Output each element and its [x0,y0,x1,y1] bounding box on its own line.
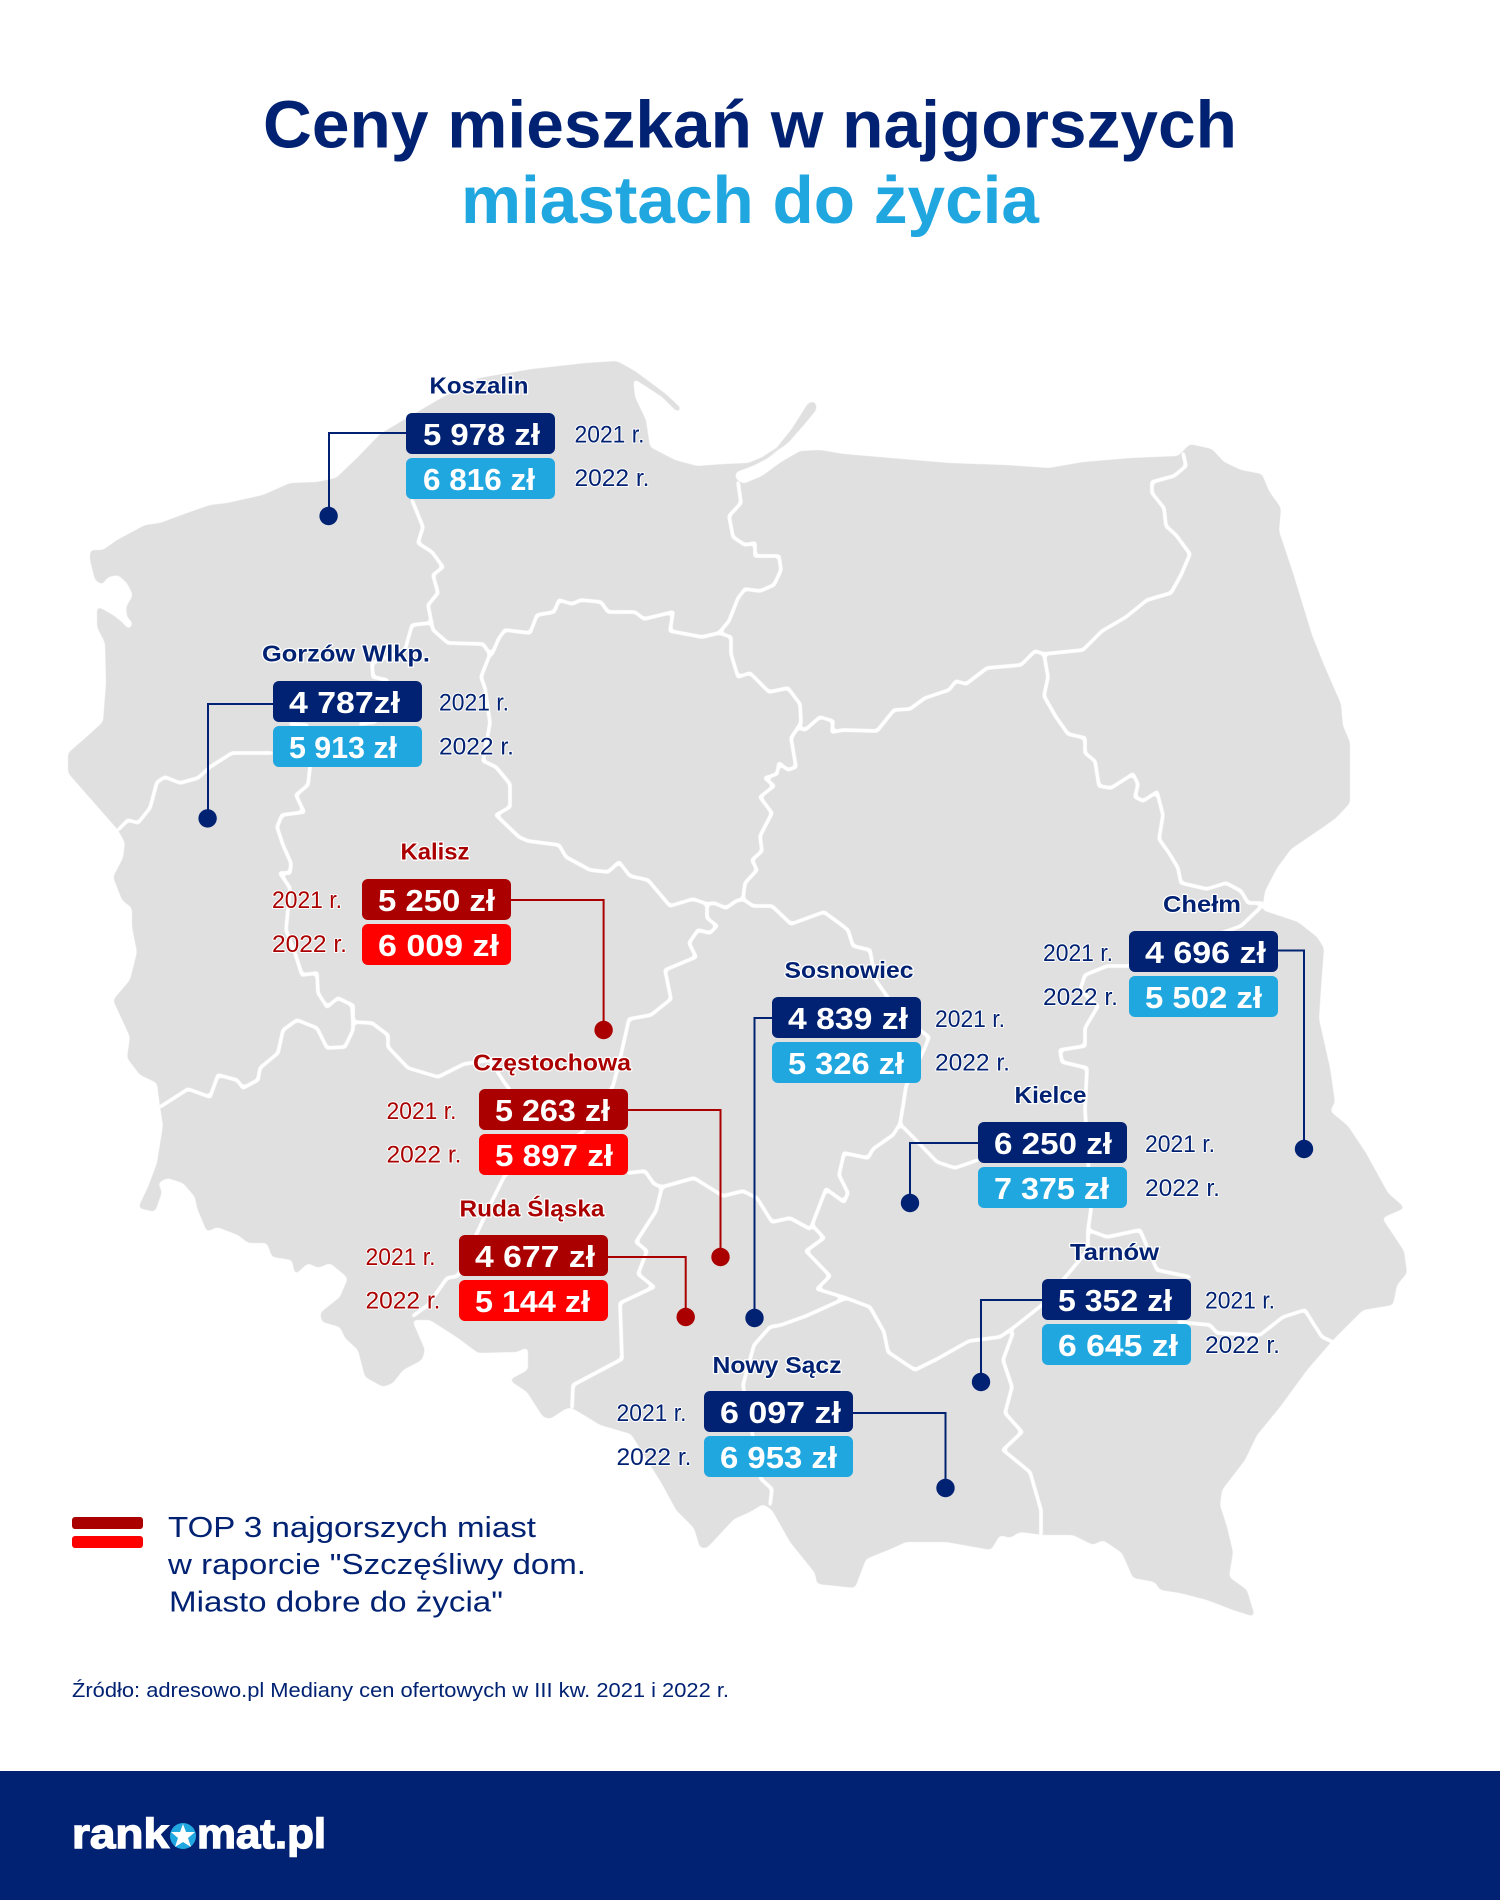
legend: w raporcie "Szczęśliwy dom. [167,1549,586,1581]
callout: Koszalin: 2022 r. [574,465,650,492]
callout: Kalisz: 5 250 zł [378,883,495,918]
callout: Kalisz: 6 009 zł [378,928,499,963]
callout: Koszalin: 6 816 zł [423,462,535,497]
callout: Częstochowa: 5 897 zł [495,1138,613,1173]
callout: Tarnów: 5 352 zł [1058,1283,1172,1318]
title [263,88,1237,238]
footer band [0,1771,1500,1900]
callout: Koszalin: Koszalin [430,372,528,398]
callout: Chełm: 2022 r. [1043,984,1118,1011]
callout: Kalisz: 2022 r. [272,931,347,958]
callout: Gorzów Wlkp.: 5 913 zł [289,730,397,765]
callout: Tarnów: Tarnów [1070,1239,1159,1265]
callout: Ruda Śląska [366,1194,695,1326]
callout: Częstochowa: 5 263 zł [495,1093,610,1128]
callout: Ruda Śląska: 5 144 zł [475,1284,590,1319]
callout: Nowy Sącz: 6 097 zł [720,1395,841,1430]
callout: Chełm: 4 696 zł [1145,935,1266,970]
callout: Koszalin: 2021 r. [574,422,644,448]
logo: rankomat.pl: rank [72,1810,170,1857]
callout: Koszalin: 5 978 zł [423,417,540,452]
callout: Chełm: 5 502 zł [1145,980,1262,1015]
callout: Koszalin [319,372,650,525]
callout: Ruda Śląska: 4 677 zł [475,1239,595,1274]
callout: Częstochowa: Częstochowa [473,1050,631,1076]
callout: Kielce: 7 375 zł [994,1171,1109,1206]
callout: Chełm: 2021 r. [1043,940,1113,967]
legend [72,1512,586,1618]
callout: Kielce: Kielce [1014,1082,1086,1108]
callout: Sosnowiec: 2021 r. [935,1006,1005,1033]
callout: Kielce: 6 250 zł [994,1126,1112,1161]
callout: Sosnowiec [745,957,1010,1327]
callout: Chełm [1043,891,1313,1158]
callout: Nowy Sącz: 2022 r. [616,1444,692,1471]
callout: Nowy Sącz [616,1352,955,1497]
legend: Miasto dobre do życia" [169,1586,503,1618]
callout: Częstochowa: 2021 r. [386,1098,456,1125]
legend: TOP 3 najgorszych miast [168,1512,536,1544]
logo: rankomat.pl [72,1810,326,1857]
callout: Sosnowiec: 5 326 zł [788,1046,904,1081]
callout: Gorzów Wlkp.: 2022 r. [439,734,514,760]
title: miastach do życia [461,163,1040,238]
callout: Gorzów Wlkp.: 4 787zł [289,685,400,720]
callout: Kielce [901,1082,1220,1212]
callout: Sosnowiec: Sosnowiec [784,957,914,983]
callout: Tarnów: 6 645 zł [1058,1328,1178,1363]
callout: Sosnowiec: 2022 r. [935,1050,1010,1076]
callout: Sosnowiec: 4 839 zł [788,1001,908,1036]
callout: Gorzów Wlkp.: 2021 r. [439,690,509,716]
callout: Nowy Sącz: Nowy Sącz [712,1352,842,1378]
source note: Źródło: adresowo.pl Mediany cen ofertowych w III kw. 2021 i 2022 r. [72,1679,729,1702]
callout: Tarnów: 2021 r. [1205,1288,1275,1314]
callout: Nowy Sącz: 2021 r. [616,1400,686,1427]
callout: Kalisz: 2021 r. [272,887,342,914]
callout: Częstochowa [386,1050,730,1266]
callout: Chełm: Chełm [1163,891,1241,917]
callout: Gorzów Wlkp. [198,640,514,828]
callout: Ruda Śląska: 2021 r. [366,1244,436,1271]
callout: Kielce: 2022 r. [1145,1175,1220,1202]
title: Ceny mieszkań w najgorszych [263,88,1237,162]
callout: Kielce: 2021 r. [1145,1131,1215,1158]
callout: Nowy Sącz: 6 953 zł [720,1440,837,1475]
callout: Ruda Śląska: Ruda Śląska [460,1194,605,1222]
callout: Kalisz [272,838,613,1039]
callout: Tarnów: 2022 r. [1205,1332,1280,1359]
callout: Częstochowa: 2022 r. [386,1142,462,1168]
callout: Gorzów Wlkp.: Gorzów Wlkp. [262,640,430,666]
callout: Ruda Śląska: 2022 r. [366,1288,440,1314]
callout: Kalisz: Kalisz [400,838,470,864]
logo: rankomat.pl: mat.pl [197,1810,326,1857]
map of Poland [68,361,1407,1617]
callout: Tarnów [972,1239,1280,1391]
